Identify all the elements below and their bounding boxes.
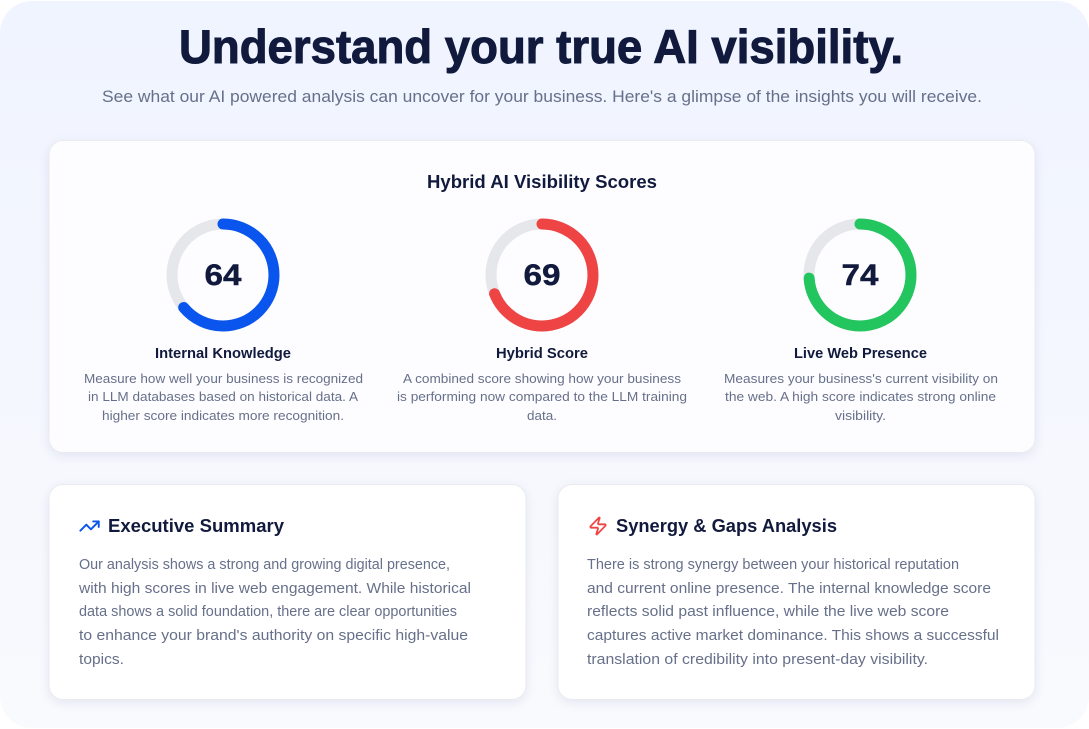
description: internal knowledge (84, 371, 363, 423)
gauge: live web presence 74 (809, 224, 911, 326)
body text: executive summary: Our analysis shows a strong and growing digital presence, (79, 557, 450, 573)
body text: synergy and gaps analysis: and current online presence. The internal knowledge score (587, 581, 991, 597)
body text: executive summary: data shows a solid foundation, there are clear opportunities (79, 604, 457, 620)
gauge: internal knowledge 64: 64 (204, 259, 242, 292)
heading: synergy and gaps analysis: Synergy & Gaps Analysis (616, 515, 837, 536)
body text: executive summary: to enhance your brand's authority on specific high-value (79, 628, 468, 644)
body text: synergy and gaps analysis: reflects solid past influence, while the live web score (587, 604, 949, 620)
icon: trending up (80, 521, 99, 531)
body text: synergy and gaps analysis: captures active market dominance. This shows a successful (587, 628, 999, 644)
gauge: live web presence 74: 74 (842, 259, 879, 292)
gauge: hybrid score 69: 69 (524, 259, 560, 292)
panel heading: Hybrid AI Visibility Scores (427, 171, 657, 192)
description: live web presence (724, 371, 998, 423)
icon: lightning bolt (590, 517, 606, 535)
description: live web presence: Measures your business's current visibility on (724, 371, 998, 386)
body text: executive summary (78, 557, 471, 668)
description: live web presence: the web. A high score indicates strong online (725, 389, 996, 404)
description: internal knowledge: higher score indicates more recognition. (102, 408, 344, 423)
description: live web presence: visibility. (835, 408, 886, 423)
panel: synergy and gaps analysis (558, 484, 1035, 700)
score label: internal knowledge: Internal Knowledge (155, 345, 291, 362)
description: hybrid score (397, 371, 687, 423)
gauge: internal knowledge 64 (172, 224, 274, 326)
body text: executive summary: topics. (79, 652, 124, 668)
title: Understand your true AI visibility. (179, 20, 903, 73)
description: hybrid score: A combined score showing how your business (403, 371, 682, 386)
description: hybrid score: data. (527, 408, 557, 423)
panel: executive summary (49, 484, 526, 700)
body text: synergy and gaps analysis: There is strong synergy between your historical reputation (587, 557, 959, 573)
heading: executive summary: Executive Summary (108, 515, 285, 536)
gauge: hybrid score 69 (491, 224, 593, 326)
description: internal knowledge: in LLM databases based on historical data. A (88, 389, 358, 404)
description: hybrid score: is performing now compared to the LLM training (397, 389, 687, 404)
subtitle: See what our AI powered analysis can uncover for your business. Here's a glimpse of the insights you will receive. (102, 88, 982, 106)
body text: executive summary: with high scores in live web engagement. While historical (78, 581, 471, 597)
score label: hybrid score: Hybrid Score (496, 345, 588, 362)
score label: live web presence: Live Web Presence (794, 345, 927, 362)
body text: synergy and gaps analysis: translation of credibility into present-day visibility. (587, 652, 928, 668)
body text: synergy and gaps analysis (587, 557, 999, 668)
panel: hybrid AI visibility scores (49, 140, 1035, 452)
description: internal knowledge: Measure how well your business is recognized (84, 371, 363, 386)
